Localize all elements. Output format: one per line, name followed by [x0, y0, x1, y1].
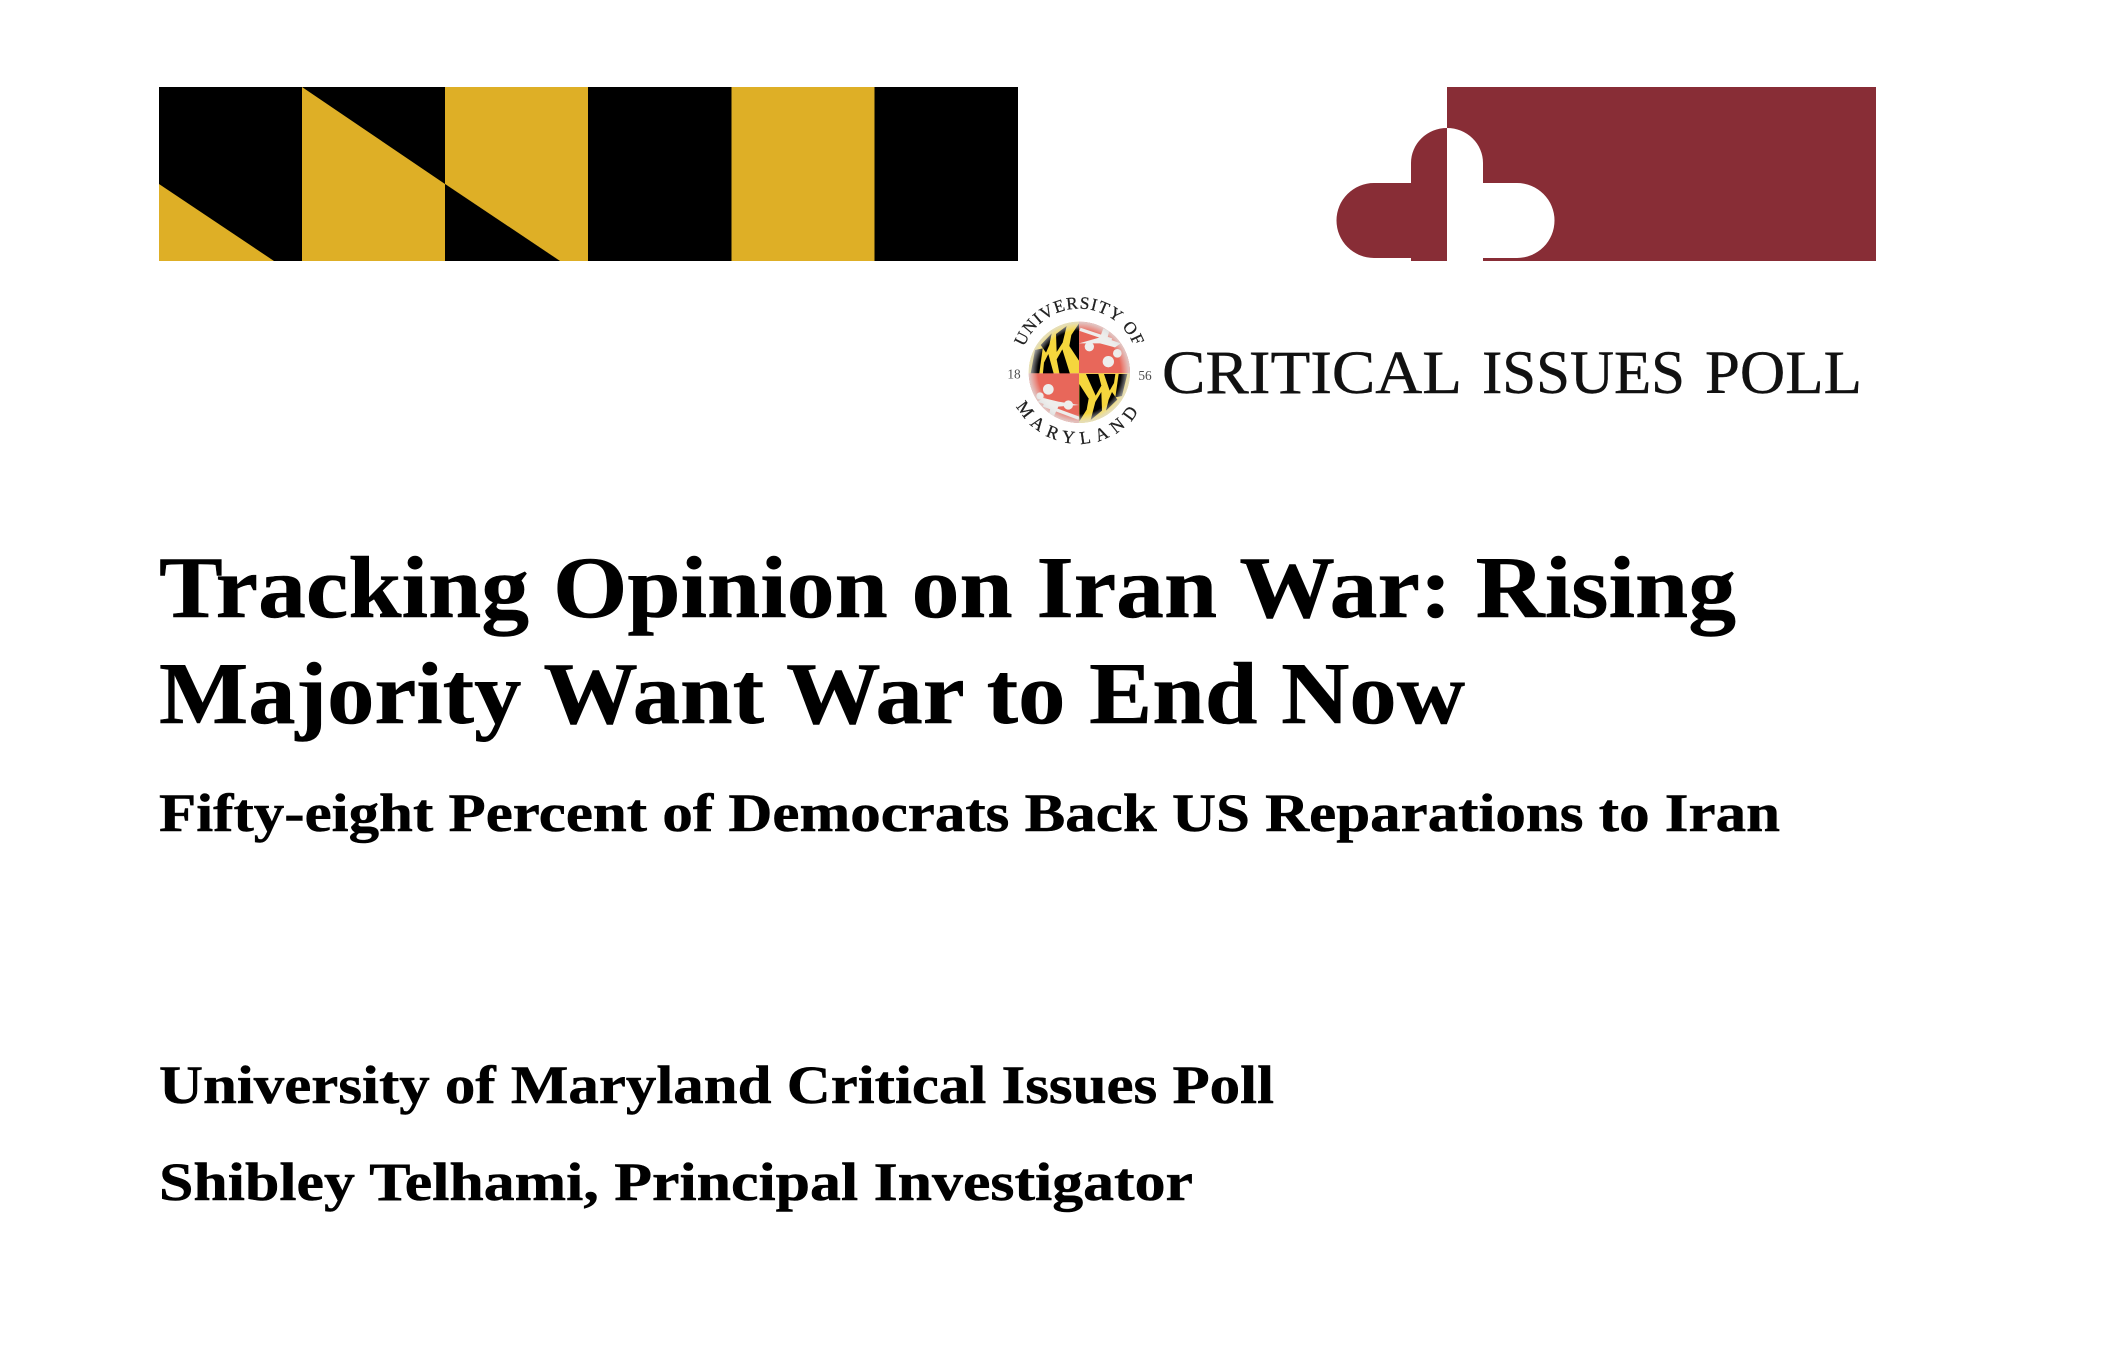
investigator line: Shibley Telhami, Principal Investigator	[159, 1152, 1193, 1212]
title: Tracking Opinion on Iran War: Rising	[159, 540, 1736, 637]
logo wordmark: Critical Issues Poll: ISSUES	[1482, 340, 1685, 407]
banner: Maryland black and gold flag pattern	[159, 87, 1018, 261]
title	[159, 540, 1736, 743]
logo wordmark: Critical Issues Poll: CRITICAL	[1162, 340, 1462, 407]
report cover page	[159, 87, 1876, 1212]
seal text: year 56: 56	[1138, 368, 1152, 383]
seal text: University of: UNIVERSITY OF	[1014, 297, 1144, 344]
seal text: year 18: 18	[1007, 367, 1021, 382]
sphere: Maryland flag globe	[1029, 322, 1130, 424]
title: Majority Want War to End Now	[159, 646, 1465, 743]
logo wordmark: Critical Issues Poll: POLL	[1705, 340, 1862, 407]
logo wordmark: Critical Issues Poll	[1162, 340, 1862, 407]
seal text: Maryland: MARYLAND	[1016, 400, 1136, 444]
logo: University of Maryland seal	[1007, 297, 1152, 444]
organization line: University of Maryland Critical Issues Poll	[159, 1055, 1274, 1115]
banner: Maryland maroon cross pattern	[1336, 87, 1876, 261]
subtitle: Fifty-eight Percent of Democrats Back US Reparations to Iran	[159, 783, 1780, 843]
